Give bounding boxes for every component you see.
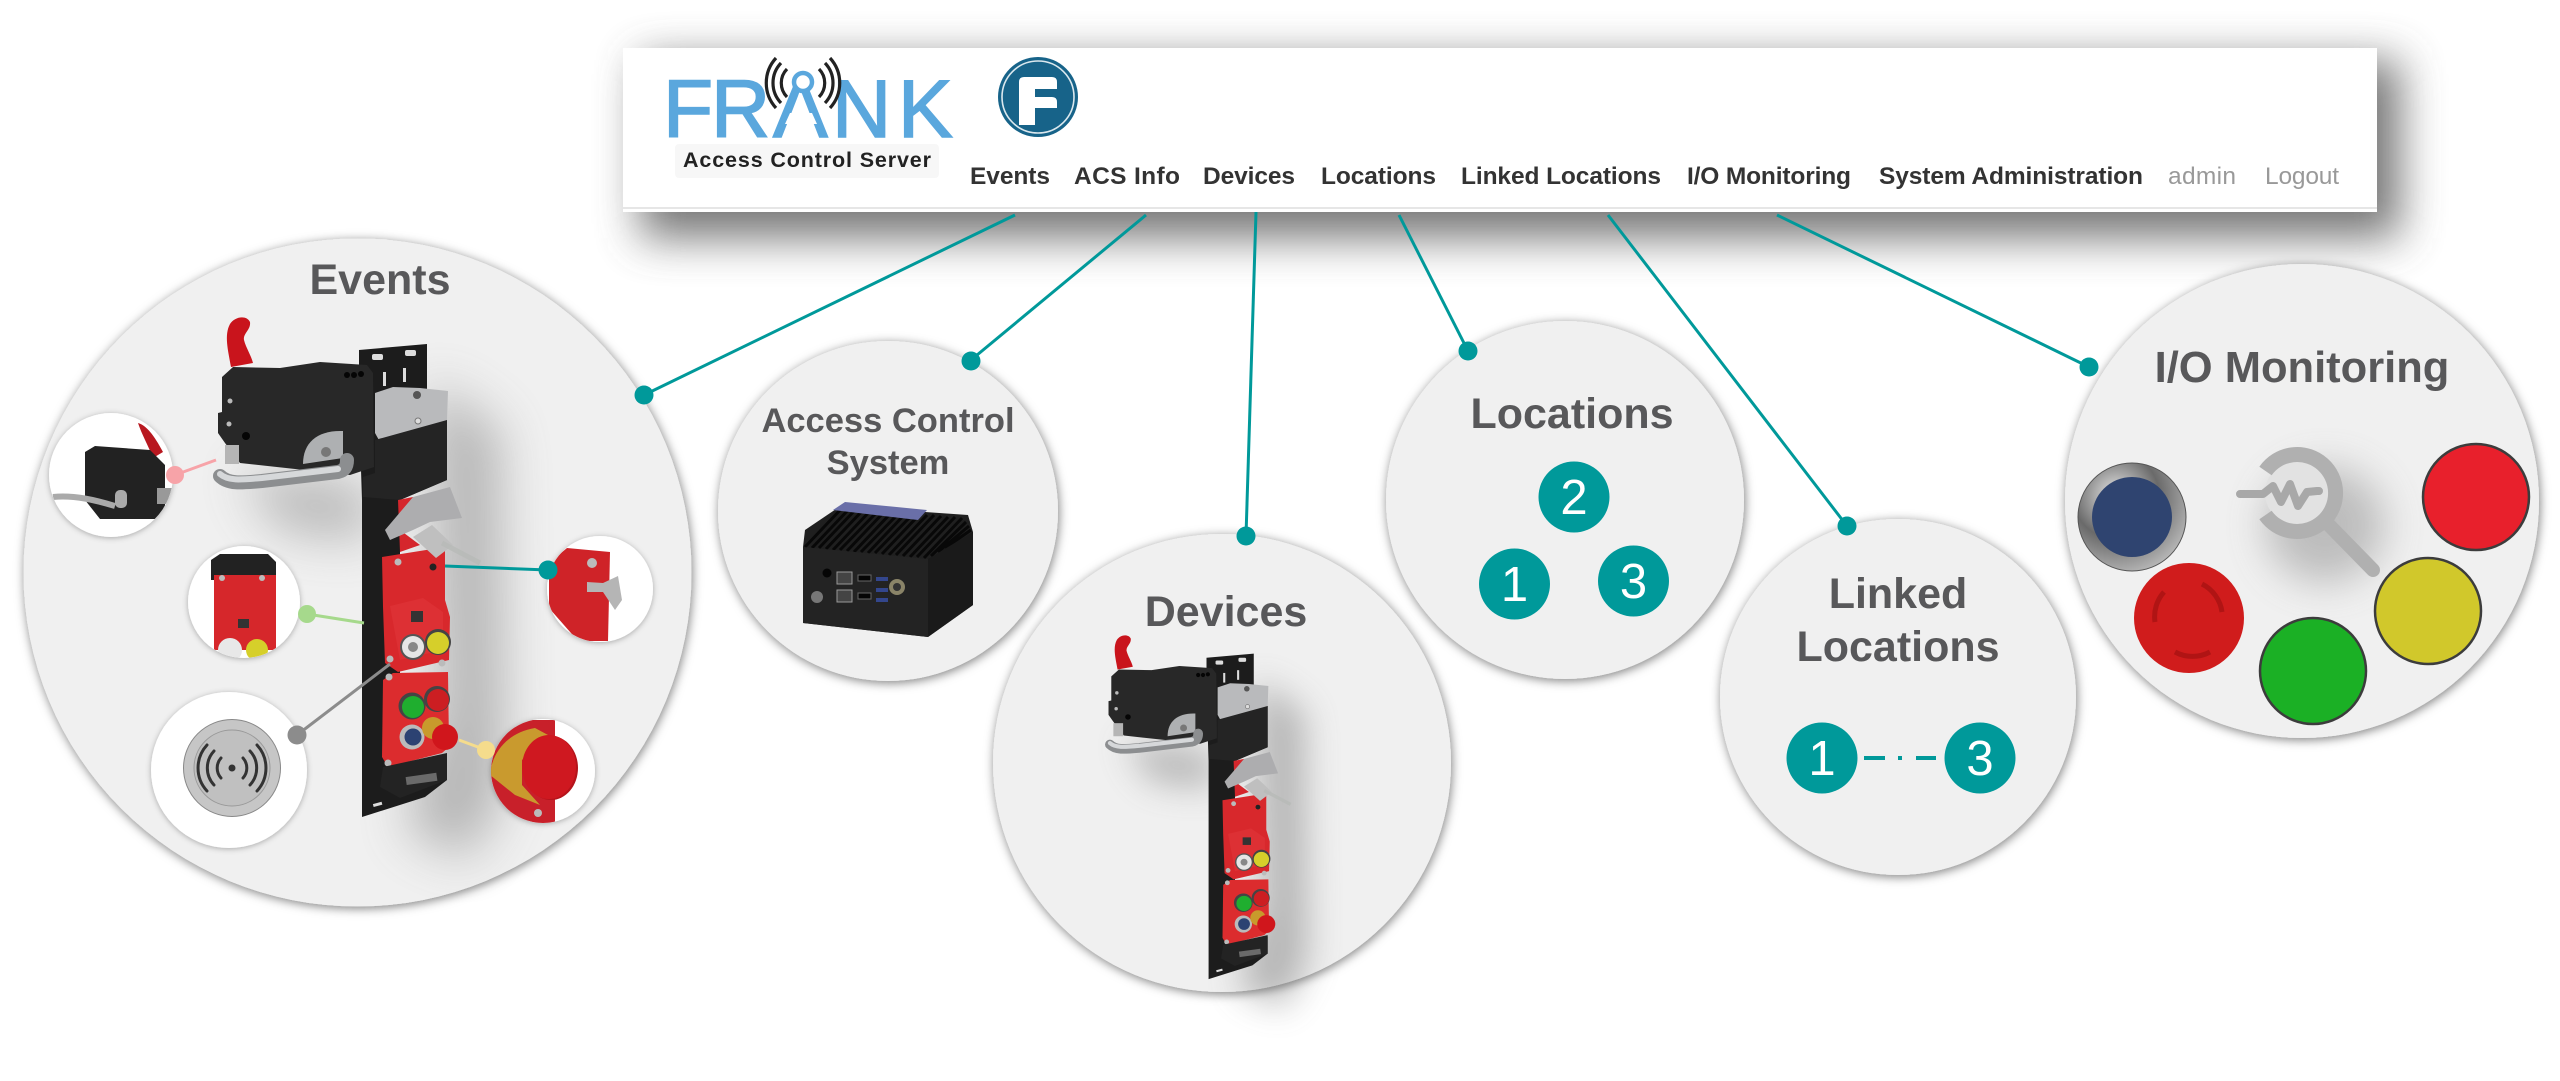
panel: events (24, 238, 692, 906)
nav menu: admin (2168, 163, 2236, 190)
logo caption: Access Control Server (683, 148, 932, 172)
device: safety lock (1109, 635, 1308, 1009)
button: yellow (2375, 558, 2481, 664)
heading: i/o monitoring: I/O Monitoring (2155, 344, 2449, 392)
nav menu: Logout (2265, 163, 2339, 190)
nav menu: Locations (1321, 163, 1436, 190)
nav menu: ACS Info (1074, 163, 1180, 190)
logo: FRANK wordmark: F (663, 64, 713, 155)
nav menu: Linked Locations (1461, 163, 1661, 190)
panel: linked locations (1720, 519, 2076, 875)
logo: FRANK wordmark (663, 58, 953, 155)
nav bar shadow (640, 60, 2400, 238)
device: safety lock (218, 317, 505, 860)
location badges 1 2 3: 2 (1560, 471, 1588, 525)
panel: devices (993, 534, 1451, 1009)
device: fanless computer (803, 502, 973, 637)
linked badges 1 to 3: 3 (1966, 732, 1994, 786)
logo: FRANK wordmark: K (898, 64, 953, 155)
callout: red enclosure inset (188, 546, 300, 662)
nav menu (970, 163, 2339, 190)
button: blue (2078, 463, 2186, 571)
icon: magnifier with signal (2240, 454, 2385, 583)
callout: key switch inset (547, 536, 653, 642)
location badges 1 2 3: 3 (1620, 555, 1647, 609)
callout: lever view inset (49, 413, 173, 537)
heading: access control system: System (827, 444, 949, 482)
connector dots (634, 342, 2098, 546)
heading: linked locations: Locations (1796, 623, 2000, 671)
nav menu: I/O Monitoring (1687, 163, 1851, 190)
button: green (2260, 618, 2366, 724)
panel: locations (1386, 321, 1744, 679)
heading: events: Events (309, 256, 451, 304)
callout: buzzer inset (151, 692, 307, 848)
connector lines from nav bar to panels (644, 212, 2089, 536)
callout: emergency stop inset (490, 719, 595, 830)
heading: devices: Devices (1145, 588, 1307, 636)
panel: access control system (718, 341, 1058, 681)
panel: i/o monitoring (2065, 264, 2539, 738)
linked badges 1 to 3 (1786, 722, 2016, 794)
logo: round F emblem (998, 57, 1078, 137)
heading: linked locations: Linked (1829, 570, 1967, 618)
nav bar (623, 48, 2377, 212)
button: red (2423, 444, 2529, 550)
location badges 1 2 3 (1479, 462, 1669, 620)
linked badges 1 to 3: 1 (1808, 732, 1836, 786)
logo caption (675, 144, 939, 178)
nav menu: Devices (1203, 163, 1295, 190)
heading: locations: Locations (1470, 390, 1674, 438)
heading: access control system: Access Control (761, 402, 1015, 440)
location badges 1 2 3: 1 (1501, 558, 1528, 612)
logo: FRANK wordmark: A (773, 64, 828, 155)
nav menu: Events (970, 163, 1050, 190)
button: red mushroom (2134, 563, 2244, 673)
connectors: event insets to device (166, 460, 558, 759)
nav menu: System Administration (1879, 163, 2143, 190)
logo: FRANK wordmark: N (832, 64, 891, 155)
logo: FRANK wordmark: R (711, 64, 770, 155)
